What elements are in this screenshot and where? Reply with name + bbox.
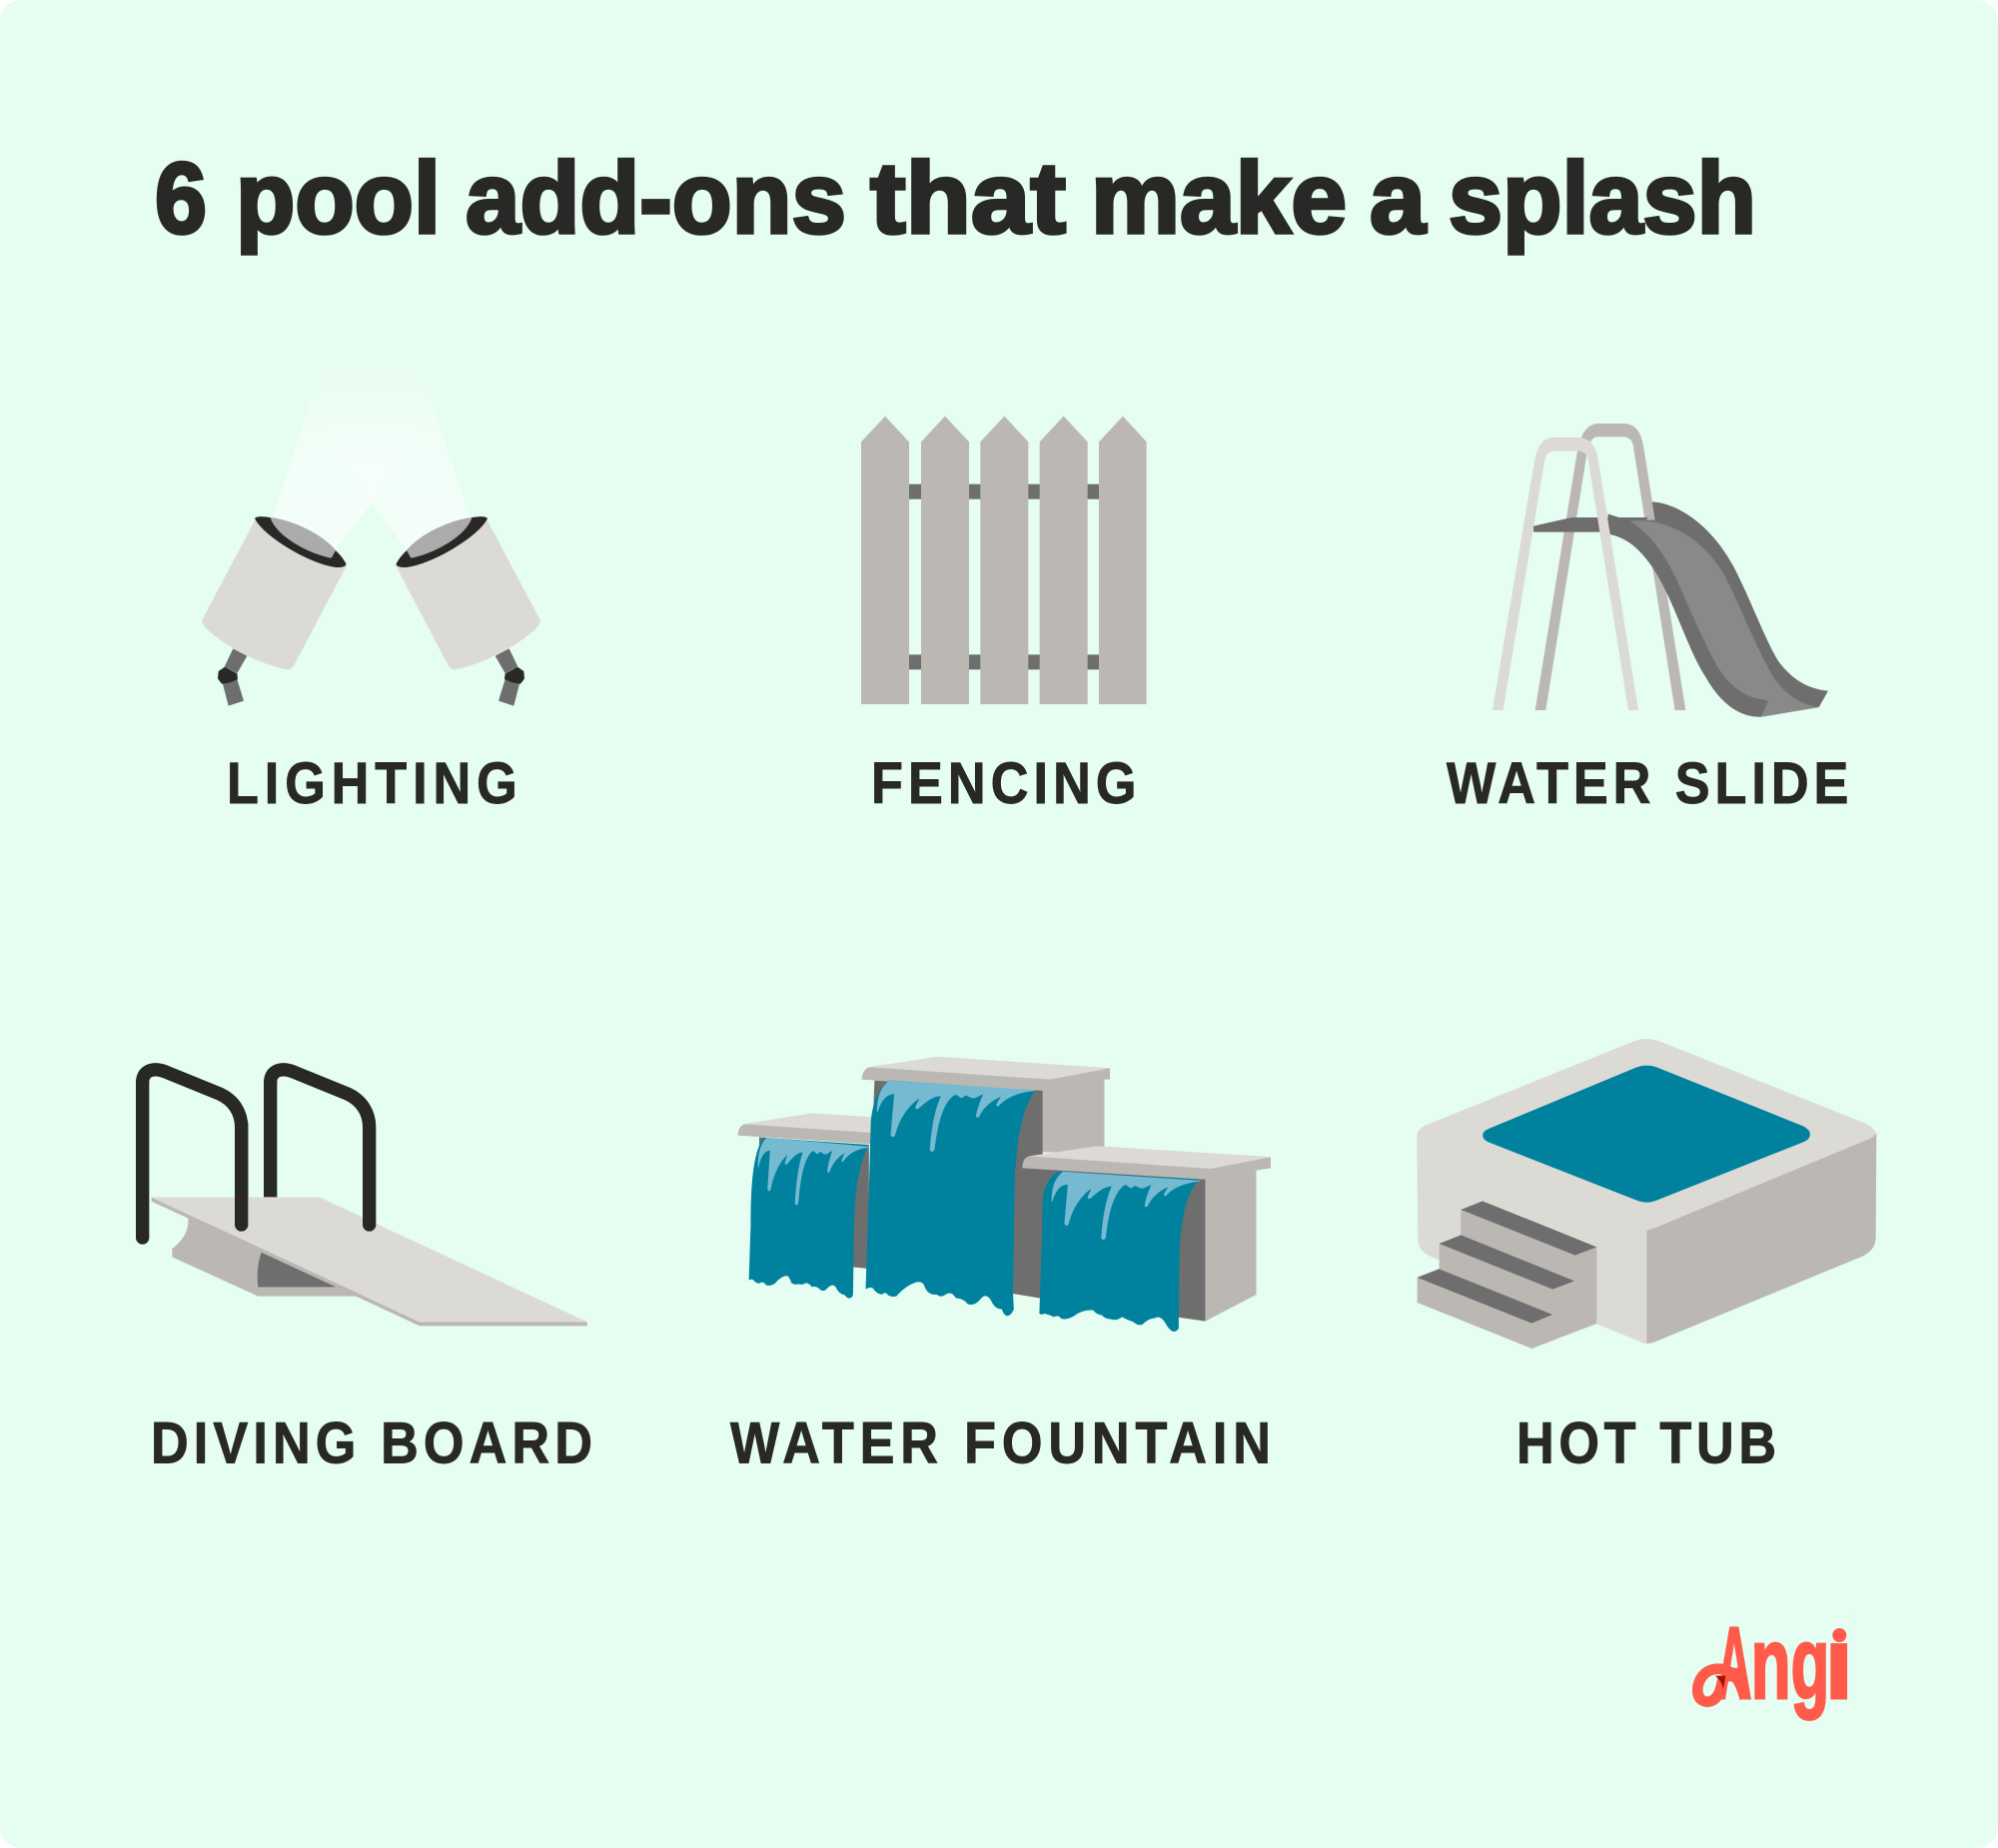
water fall: right <box>1039 1172 1200 1332</box>
label: water fountain: WATER FOUNTAIN <box>730 1410 1271 1475</box>
logo: Angi <box>1697 1606 1853 1720</box>
panel: diving board <box>136 1070 592 1475</box>
logo: Angi: g <box>1791 1606 1829 1720</box>
icon: hot tub <box>1417 1039 1876 1349</box>
panel: hot tub <box>1417 1039 1876 1475</box>
water fall: middle <box>866 1081 1035 1316</box>
label: fencing: FENCING <box>871 750 1137 816</box>
icon: diving board <box>136 1070 587 1326</box>
left spotlight <box>202 516 347 706</box>
label: lighting: LIGHTING <box>227 750 517 816</box>
title: make <box>1091 143 1347 255</box>
title: that <box>870 143 1066 255</box>
panel: fencing <box>861 417 1147 816</box>
steps <box>1418 1201 1596 1349</box>
water <box>1483 1066 1810 1203</box>
light beams <box>273 343 471 551</box>
label: diving board: DIVING BOARD <box>151 1410 592 1475</box>
panel: lighting <box>202 343 540 816</box>
icon: two spotlights <box>202 343 540 706</box>
logo: Angi: A <box>1716 1606 1751 1720</box>
title: splash <box>1449 143 1756 255</box>
icon: water slide <box>1493 424 1828 717</box>
label: water slide: WATER SLIDE <box>1447 750 1848 816</box>
panel: water fountain <box>730 1057 1271 1475</box>
middle tier block <box>867 1079 1104 1299</box>
left tier block <box>737 1114 874 1269</box>
logo: Angi: n <box>1751 1606 1791 1720</box>
middle tier slab <box>861 1057 1110 1091</box>
panel: water slide <box>1447 424 1848 816</box>
title: 6 <box>155 143 207 255</box>
title: a <box>1370 143 1427 255</box>
logo: Angi: i <box>1825 1606 1853 1720</box>
title: add-ons <box>466 143 846 255</box>
label: hot tub: HOT TUB <box>1516 1410 1776 1475</box>
water fall: left <box>749 1138 869 1299</box>
title: pool <box>236 143 441 255</box>
right spotlight <box>396 516 540 706</box>
icon: water fountain <box>737 1057 1271 1332</box>
right tier block <box>1013 1146 1271 1322</box>
icon: picket fence <box>861 417 1147 704</box>
